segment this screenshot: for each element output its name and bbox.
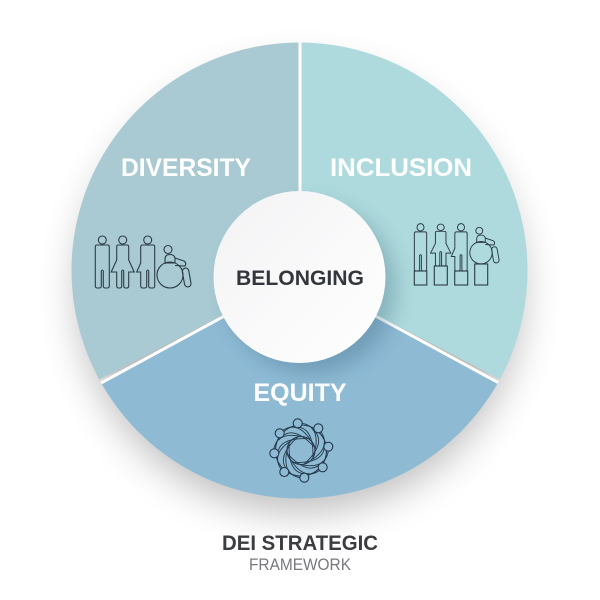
center circle: belonging — [214, 191, 386, 363]
subtitle: FRAMEWORK — [249, 555, 352, 574]
heading: inclusion: INCLUSION — [330, 154, 472, 182]
icon: diverse people — [95, 236, 192, 288]
title: DEI STRATEGIC — [222, 532, 378, 555]
icon: equity network ring — [270, 419, 333, 482]
center circle shadow — [226, 203, 396, 373]
panel: equity segment — [101, 318, 498, 498]
panel: diversity segment — [72, 42, 298, 380]
center label: BELONGING — [236, 267, 364, 290]
heading: equity: EQUITY — [254, 379, 347, 407]
drop shadow beneath wheel — [78, 68, 522, 512]
icon: people on inclusive platforms — [414, 224, 500, 285]
panel: inclusion segment — [302, 42, 528, 379]
circular framework wheel — [72, 42, 528, 498]
heading: diversity: DIVERSITY — [121, 154, 251, 182]
